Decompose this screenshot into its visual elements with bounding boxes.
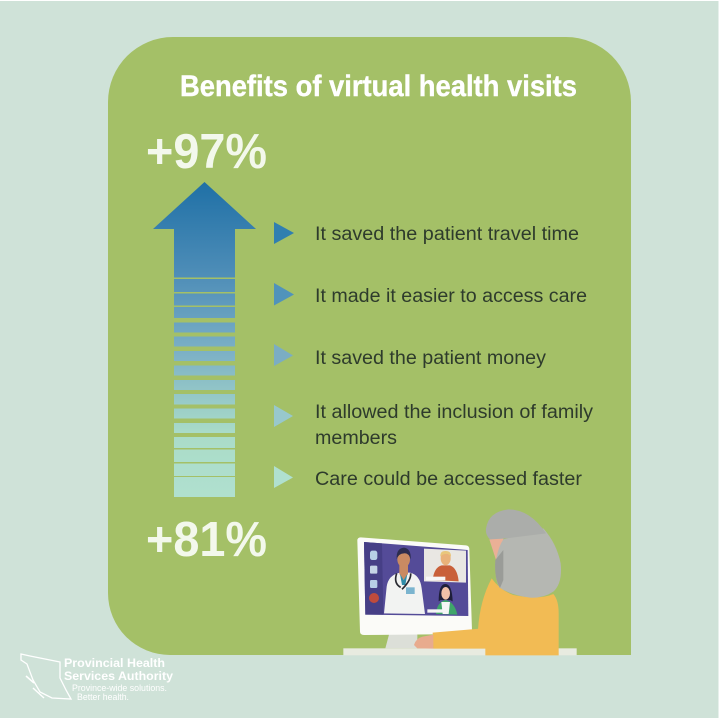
logo: Provincial Health Services Authority: Province-wide solutions. [72, 683, 167, 693]
woman [414, 509, 561, 655]
torso [478, 578, 559, 655]
gradient arrow [153, 182, 256, 497]
sleeve [433, 629, 490, 649]
benefit 1: It saved the patient travel time [315, 224, 579, 245]
panel: green background [108, 37, 631, 655]
monitor stand [385, 633, 417, 648]
doctor [384, 548, 425, 614]
icon: BC map outline [21, 654, 71, 699]
title: Benefits of virtual health visits [180, 70, 577, 103]
logo: Provincial Health Services Authority: Services Authority [64, 671, 174, 683]
hand [414, 635, 433, 649]
participant 1 [424, 549, 466, 583]
video call screen [364, 542, 468, 616]
benefit 3: It saved the patient money [315, 348, 547, 369]
logo: Provincial Health Services Authority [21, 654, 174, 702]
benefit 5: Care could be accessed faster [315, 469, 583, 490]
benefit 4: It allowed the inclusion of family [315, 402, 594, 423]
benefit 3 [274, 344, 547, 369]
grey hair [495, 528, 561, 598]
logo: Provincial Health Services Authority: Better health. [77, 692, 129, 702]
illustration: video call at computer [343, 509, 577, 655]
toolbar icons [369, 551, 379, 603]
monitor [357, 537, 472, 635]
logo: Provincial Health Services Authority: Provincial Health [64, 658, 165, 670]
face [489, 537, 503, 562]
bottom figure: +81%: +81% [146, 513, 267, 567]
benefit 4 [274, 402, 594, 449]
benefit 2: It made it easier to access care [315, 286, 587, 307]
top figure: +97%: +97% [146, 125, 267, 179]
benefit 4: members [315, 428, 397, 449]
participant 2 [427, 584, 457, 615]
desk [343, 648, 577, 655]
